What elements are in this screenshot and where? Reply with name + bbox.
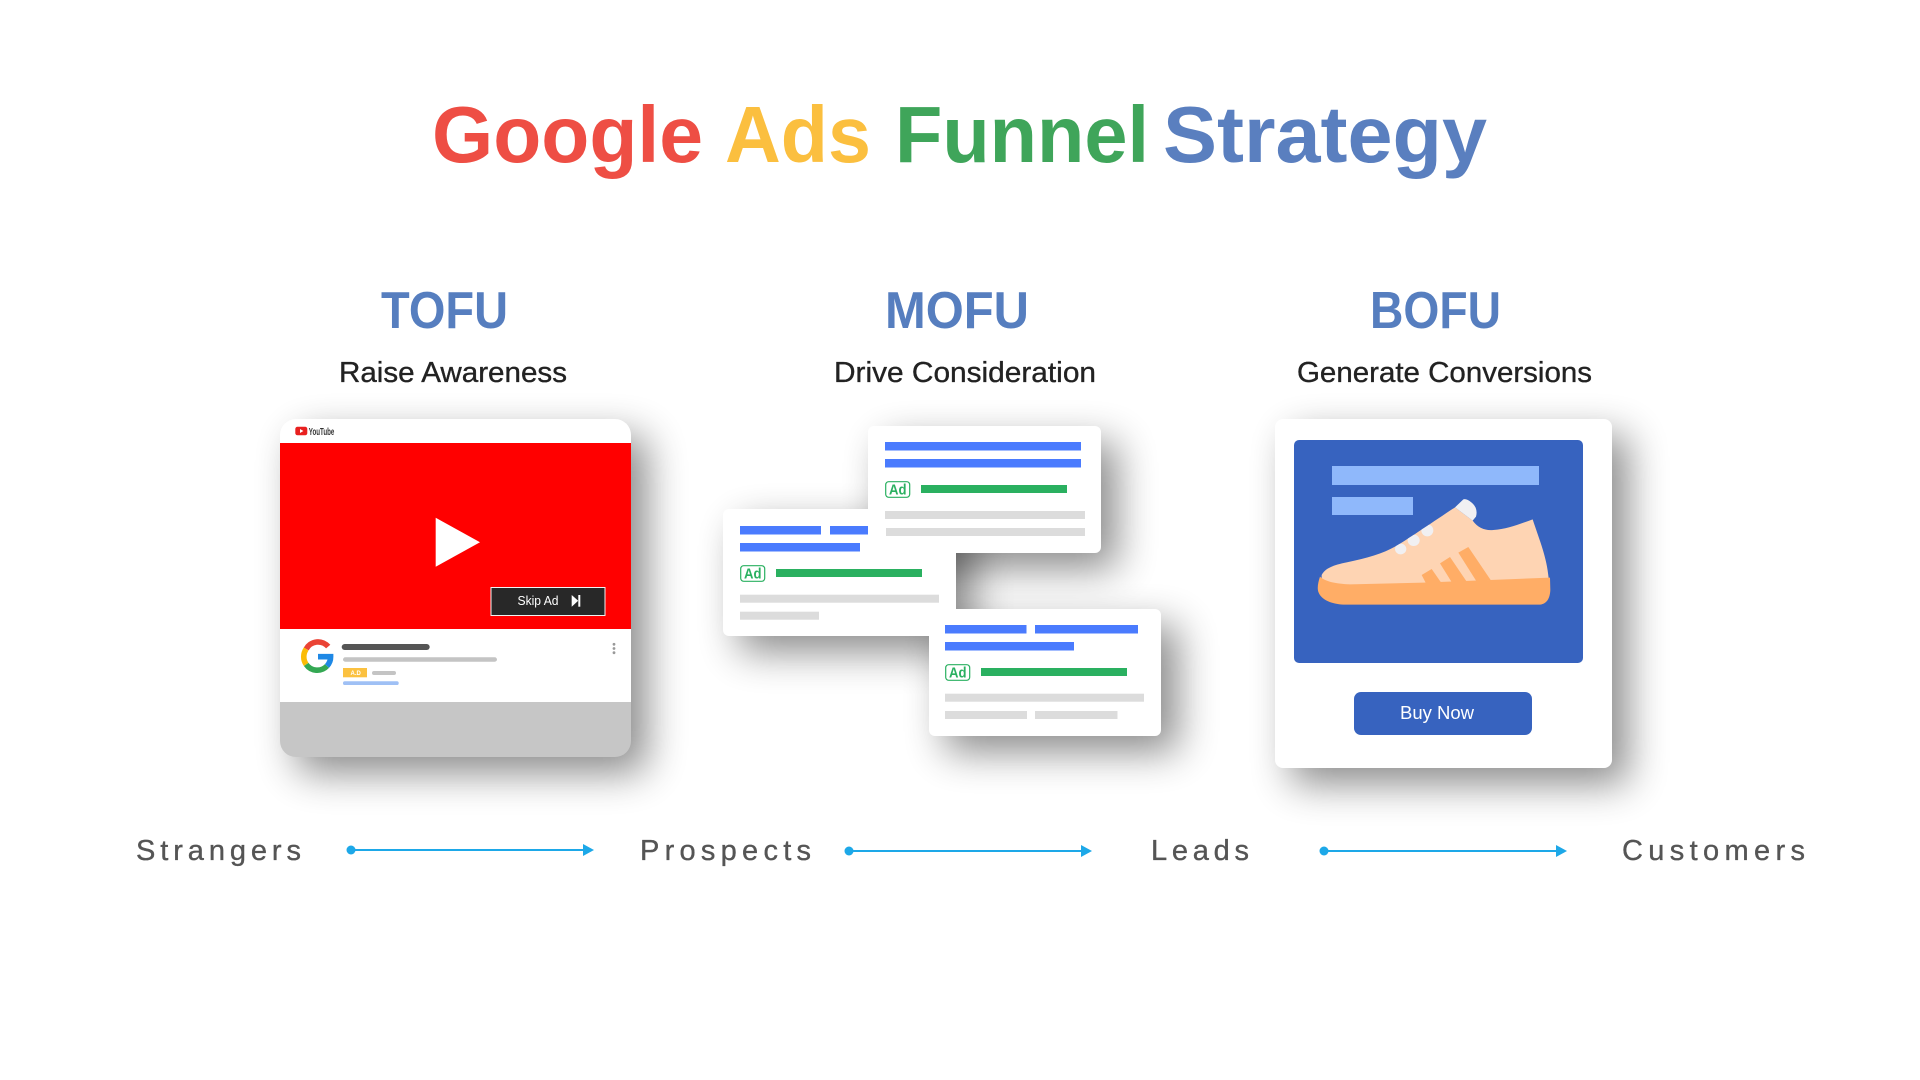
search ad card: top xyxy=(868,426,1101,553)
subheading: Drive Consideration: Drive Consideration xyxy=(834,357,1096,389)
ad metadata lines: A.D xyxy=(350,671,362,677)
icon: sneaker xyxy=(1318,499,1550,605)
title word: Strategy: Strategy xyxy=(1163,90,1488,179)
title xyxy=(432,90,1488,179)
icon: YouTube logo xyxy=(295,427,335,438)
subheading: Generate Conversions: Generate Conversions xyxy=(1297,357,1592,389)
product image tile xyxy=(1294,440,1583,663)
panel: product ad xyxy=(1275,419,1628,784)
button: Skip Ad: Skip Ad xyxy=(518,593,558,608)
search ad card: bottom xyxy=(929,609,1161,736)
label: Customers: Customers xyxy=(1622,835,1805,867)
button: Buy Now xyxy=(1354,692,1532,735)
heading: BOFU: BOFU xyxy=(1370,282,1501,340)
search ad card: top: Ad xyxy=(889,482,906,498)
title word: Ads: Ads xyxy=(725,90,871,179)
arrow: Strangers to Prospects xyxy=(346,844,594,856)
button: Skip Ad xyxy=(491,588,605,616)
title word: Funnel: Funnel xyxy=(895,90,1149,179)
label: Strangers: Strangers xyxy=(136,835,301,867)
search ad card: left xyxy=(723,509,956,636)
arrow: Prospects to Leads xyxy=(844,845,1092,857)
panel: YouTube video ad xyxy=(280,419,647,773)
heading: MOFU: MOFU xyxy=(885,282,1029,340)
icon: play triangle xyxy=(436,518,480,567)
button: Buy Now: Buy Now xyxy=(1400,703,1475,723)
label: Leads: Leads xyxy=(1151,835,1249,867)
arrow: Leads to Customers xyxy=(1320,845,1567,857)
icon: YouTube logo: YouTube xyxy=(309,427,335,438)
title word: Google: Google xyxy=(432,90,703,179)
search ad card: left: Ad xyxy=(744,566,762,582)
panel: search ads xyxy=(723,426,1178,752)
ad metadata lines xyxy=(342,644,497,685)
heading: TOFU: TOFU xyxy=(381,282,508,340)
label: Prospects: Prospects xyxy=(640,835,811,867)
icon: three-dot menu xyxy=(613,643,615,654)
search ad card: bottom: Ad xyxy=(949,664,966,682)
subheading: Raise Awareness: Raise Awareness xyxy=(339,357,567,389)
icon: Google G xyxy=(304,642,331,670)
